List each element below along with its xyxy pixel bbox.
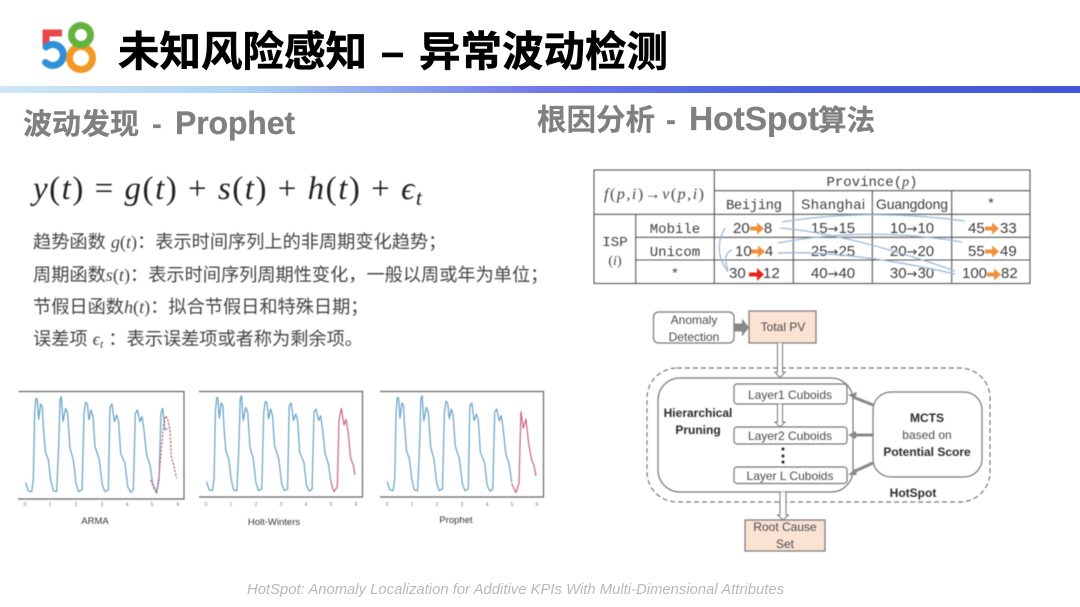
chart: Prophet: 2 xyxy=(436,502,439,508)
table values: changed cells: 4 xyxy=(765,243,773,260)
chart: ARMA: 5 xyxy=(151,502,154,508)
chart: ARMA: 0 xyxy=(24,502,27,508)
heading: wave detection: 波动发现 xyxy=(23,109,139,141)
table values: unchanged cells: 30→30 xyxy=(890,265,934,282)
caption: ARMA: ARMA xyxy=(81,516,109,527)
table header: columns: Guangdong xyxy=(876,196,948,212)
chart: Holt-Winters: 4 xyxy=(305,502,308,508)
box: MCTS: Potential Score xyxy=(883,445,971,459)
chart: Holt-Winters xyxy=(199,392,362,528)
chart: Prophet: 4 xyxy=(486,502,489,508)
box: hierarchical pruning xyxy=(658,378,853,492)
chart: Holt-Winters: 6 xyxy=(355,502,358,508)
table row labels: Mobile xyxy=(650,222,700,238)
table values: changed cells: 45 xyxy=(968,220,985,237)
table values: unchanged cells: 10→10 xyxy=(890,220,934,237)
arrow: layer 1 to layer 2 xyxy=(775,404,785,427)
caption: Holt-Winters: Holt-Winters xyxy=(248,517,300,528)
table header: columns xyxy=(726,196,995,214)
box: anomaly detection xyxy=(654,312,734,344)
ellipsis dots xyxy=(782,448,784,464)
icon: orange and red arrows xyxy=(749,222,1001,281)
table header: columns: * xyxy=(987,197,995,213)
chart: Prophet: 5 xyxy=(511,502,514,508)
table values: unchanged cells: 20→20 xyxy=(890,243,934,260)
title: 异常波动检测 xyxy=(419,28,668,75)
line: error term: ：表示误差项或者称为剩余项。 xyxy=(103,329,363,349)
header gradient bar xyxy=(0,86,1080,93)
heading: wave detection: - xyxy=(152,109,162,141)
heading: root cause analysis: HotSpot xyxy=(689,101,819,138)
arrows: MCTS to layers xyxy=(848,392,873,475)
table values: unchanged cells: 25→25 xyxy=(811,243,855,260)
label: HotSpot: HotSpot xyxy=(890,486,936,500)
label: hierarchical pruning: Hierarchical xyxy=(664,406,732,420)
icon: 58 logo xyxy=(46,26,92,70)
chart: Holt-Winters: 1 xyxy=(230,502,233,508)
footer citation: HotSpot: Anomaly Localization for Additive KPIs With Multi-Dimensional Attributes xyxy=(247,582,785,598)
box: MCTS: MCTS xyxy=(910,411,944,425)
heading: wave detection: Prophet xyxy=(175,105,295,141)
table header: columns: Shanghai xyxy=(801,196,865,212)
table values: changed cells: 100 xyxy=(962,265,987,282)
table header: function: f(p,i)→v(p,i) xyxy=(604,186,704,203)
table: province and ISP values xyxy=(594,170,1030,284)
heading: root cause analysis: 根因分析 xyxy=(537,104,655,137)
line: holiday function: 节假日函数h(t)：拟合节假日和特殊日期； xyxy=(33,297,368,318)
chart: Holt-Winters: 5 xyxy=(330,502,333,508)
box: root cause set: Root Cause xyxy=(753,520,817,534)
table values: unchanged cells xyxy=(811,220,934,282)
table values: unchanged cells: 15→15 xyxy=(811,220,855,237)
table values: changed cells: 33 xyxy=(1000,220,1017,237)
box: layer L xyxy=(734,467,847,484)
chart: Prophet: 0 xyxy=(386,502,389,508)
box: HotSpot dashed container xyxy=(647,368,990,502)
chart: ARMA: 6 xyxy=(177,502,180,508)
chart: ARMA xyxy=(18,392,184,527)
box: layer 1 xyxy=(734,384,847,404)
line: periodic function: 周期函数s(t)：表示时间序列周期性变化，一般以周或年为单位； xyxy=(33,265,548,286)
chart: ARMA: 1 xyxy=(49,502,52,508)
table values: changed cells: 82 xyxy=(1001,265,1018,282)
box: anomaly detection: Detection xyxy=(669,330,719,344)
aggregation curves xyxy=(719,215,965,274)
title: 未知风险感知 xyxy=(118,28,367,75)
arrow: pruning to root cause xyxy=(778,492,788,520)
table values: changed cells: 10 xyxy=(735,243,752,260)
chart: Holt-Winters: 0 xyxy=(205,502,208,508)
chart: Prophet: 3 xyxy=(461,502,464,508)
table header: province: Province(p) xyxy=(826,175,918,191)
flowchart: HotSpot xyxy=(647,311,990,551)
box: anomaly detection: Anomaly xyxy=(671,313,717,327)
chart: Prophet: 6 xyxy=(536,502,539,508)
line: error term: 误差项 ϵ xyxy=(33,329,100,349)
table values: changed cells: 55 xyxy=(968,243,985,260)
table values: unchanged cells: 40→40 xyxy=(811,265,855,282)
line: error term: t xyxy=(100,337,104,351)
table values: changed cells: 30 xyxy=(729,265,746,282)
table row labels: * xyxy=(671,267,679,283)
table row labels xyxy=(602,222,700,283)
table values: changed cells: 20 xyxy=(733,220,750,237)
table values: changed cells: 12 xyxy=(763,265,780,282)
table row labels: Unicom xyxy=(650,245,700,261)
table values: changed cells: 49 xyxy=(1000,243,1017,260)
title: – xyxy=(381,28,404,75)
box: layer 2: Layer2 Cuboids xyxy=(748,429,832,443)
table values: changed cells xyxy=(729,220,1018,282)
chart: Prophet: 1 xyxy=(411,502,414,508)
box: total PV: Total PV xyxy=(761,320,805,334)
box: layer 2 xyxy=(734,427,847,444)
arrow: anomaly to total PV xyxy=(734,318,749,336)
formula: y(t) = g(t) + s(t) + h(t) + ϵ xyxy=(33,171,414,207)
box: root cause set xyxy=(745,520,825,551)
table header: columns: Beijing xyxy=(726,198,782,214)
box: layer 1: Layer1 Cuboids xyxy=(748,388,832,402)
table row labels: ISP xyxy=(602,235,628,251)
line: trend function: 趋势函数 g(t)：表示时间序列上的非周期变化趋势； xyxy=(33,232,446,253)
chart: Prophet xyxy=(380,392,544,526)
box: MCTS xyxy=(873,392,982,477)
box: root cause set: Set xyxy=(776,537,795,551)
box: total PV xyxy=(749,311,816,343)
heading: root cause analysis: - xyxy=(666,104,676,137)
table row labels: (i) xyxy=(608,254,622,269)
chart: ARMA: 4 xyxy=(126,502,129,508)
box: MCTS: based on xyxy=(902,428,952,442)
chart: Holt-Winters: 3 xyxy=(280,502,283,508)
text block: definitions xyxy=(33,232,548,351)
label: hierarchical pruning: Pruning xyxy=(675,423,721,437)
chart: ARMA: 2 xyxy=(75,502,78,508)
label: hierarchical pruning xyxy=(664,406,732,437)
chart: Holt-Winters: 2 xyxy=(255,502,258,508)
formula: t xyxy=(416,185,423,210)
caption: Prophet: Prophet xyxy=(439,515,473,526)
arrow: total PV to layer 1 xyxy=(775,343,785,378)
chart: ARMA: 3 xyxy=(101,502,104,508)
table values: changed cells: 8 xyxy=(764,220,772,237)
box: layer L: Layer L Cuboids xyxy=(747,469,833,483)
heading: root cause analysis: 算法 xyxy=(818,105,875,137)
